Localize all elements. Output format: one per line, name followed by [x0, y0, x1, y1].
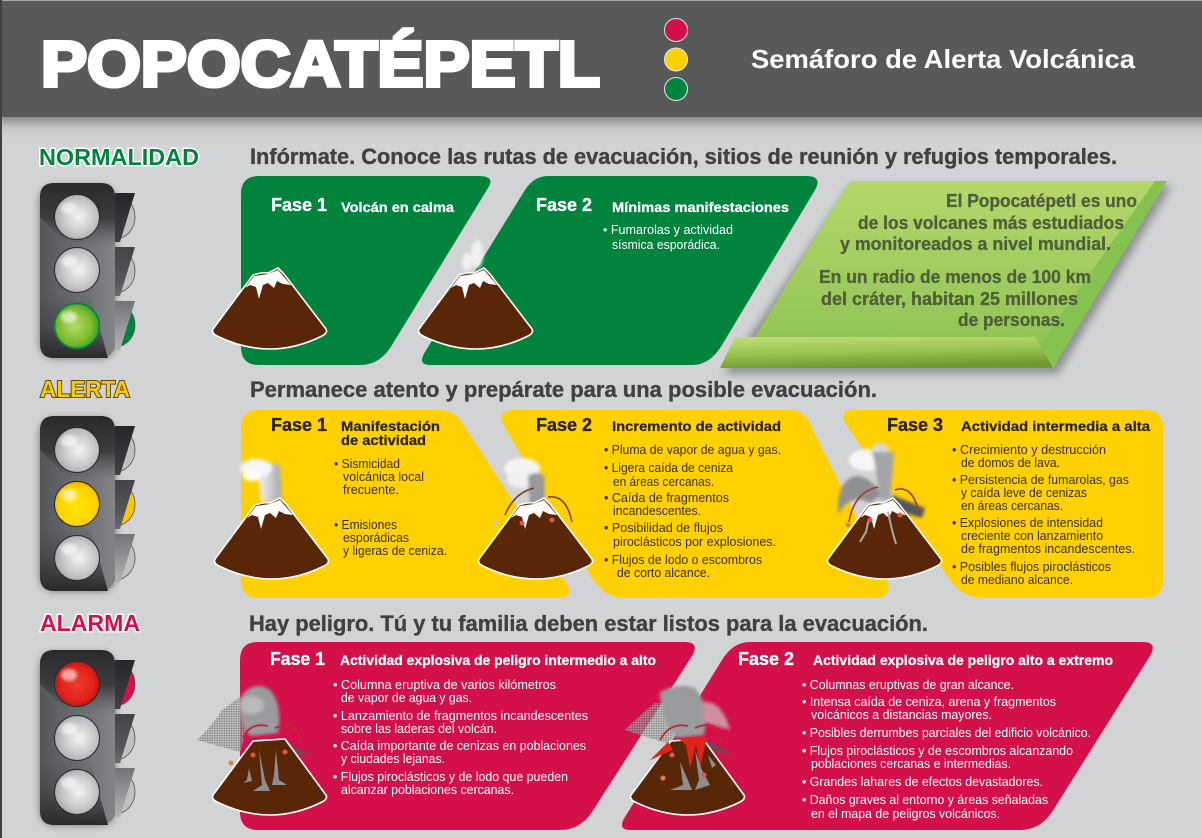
panel: normalidad fase 2: Mínimas manifestaciones: [612, 199, 789, 215]
heading: alerta: Permanece atento y prepárate para una posible evacuación.: [250, 377, 877, 402]
heading: alarma: Hay peligro. Tú y tu familia deben estar listos para la evacuación.: [249, 611, 928, 636]
panel: alerta fase 3: de fragmentos incandescentes.: [961, 542, 1135, 556]
panel: alarma fase 1: • Caída importante de cenizas en poblaciones: [333, 739, 586, 753]
panel: alerta fase 1: Fase 1: [271, 415, 327, 435]
panel: alerta fase 2: de corto alcance.: [617, 566, 710, 580]
panel: alarma fase 2: volcánicos a distancias mayores.: [811, 708, 992, 722]
panel: alerta fase 2: • Posibilidad de flujos: [604, 521, 723, 535]
icon: volcano alerta 1: [214, 459, 328, 579]
panel: normalidad fase 1: Volcán en calma: [341, 199, 454, 215]
panel: alarma fase 2: • Flujos piroclásticos y de escombros alcanzando: [802, 744, 1073, 758]
panel: alarma fase 2: poblaciones cercanas e intermedias.: [811, 757, 1011, 771]
panel: alarma fase 2: • Daños graves al entorno y áreas señaladas: [802, 793, 1048, 807]
panel: alerta fase 2: • Pluma de vapor de agua y gas.: [604, 443, 781, 457]
panel: alerta fase 3: y caída leve de cenizas: [961, 486, 1087, 500]
label: ALARMA: ALARMA: [40, 610, 140, 636]
panel: alerta fase 1: • Emisiones: [334, 518, 397, 532]
panel: alarma fase 1: • Flujos piroclásticos y de lodo que pueden: [333, 770, 568, 784]
icon: volcano fumarole: [418, 240, 532, 349]
panel: alarma fase 2: Actividad explosiva de peligro alto a extremo: [813, 652, 1113, 668]
panel: alerta fase 1: • Sismicidad: [334, 457, 400, 471]
panel: alarma fase 1: Fase 1: [270, 649, 325, 669]
panel: alerta fase 1: frecuente.: [343, 483, 399, 497]
panel: alarma fase 2: • Columnas eruptivas de gran alcance.: [802, 678, 1014, 692]
panel: normalidad fase 2: Fase 2: [536, 195, 592, 215]
note: green folded paper: [720, 181, 1172, 374]
panel: alerta fase 3: Actividad intermedia a alta: [961, 418, 1150, 434]
panel: alerta fase 3: de mediano alcance.: [961, 573, 1073, 587]
panel: alerta fase 3: de domos de lava.: [961, 456, 1060, 470]
panel: alerta fase 1: [241, 410, 569, 598]
header traffic dots: [664, 18, 688, 100]
note: green folded paper: de personas.: [958, 310, 1065, 330]
panel: alarma fase 1: sobre las laderas del volcán.: [341, 722, 497, 736]
icon: volcano alerta 3: [828, 443, 942, 579]
panel: normalidad fase 2: sísmica esporádica.: [612, 238, 720, 252]
note: green folded paper: de los volcanes más estudiados: [858, 213, 1124, 233]
panel: alerta fase 2: [502, 410, 888, 598]
label: NORMALIDAD: NORMALIDAD: [39, 144, 199, 170]
note: green folded paper: del cráter, habitan 25 millones: [821, 289, 1078, 309]
panel: alerta fase 2: • Ligera caída de ceniza: [604, 461, 733, 475]
panel: alerta fase 2: Fase 2: [536, 415, 592, 435]
panel: alerta fase 2: en áreas cercanas.: [613, 475, 714, 489]
icon: volcano calm: [212, 268, 326, 349]
heading: normalidad: Infórmate. Conoce las rutas de evacuación, sitios de reunión y refugios temporales.: [250, 144, 1117, 169]
panel: alerta fase 3: • Posibles flujos piroclásticos: [952, 560, 1111, 574]
icon: volcano alarma 1: [197, 686, 326, 815]
panel: alarma fase 1: • Lanzamiento de fragmentos incandescentes: [333, 709, 588, 723]
panel: alarma fase 1: Actividad explosiva de peligro intermedio a alto: [340, 652, 656, 668]
panel: alarma fase 2: en el mapa de peligros volcánicos.: [811, 807, 1000, 821]
note: green folded paper: En un radio de menos de 100 km: [819, 267, 1091, 287]
panel: alerta fase 3: creciente con lanzamiento: [961, 529, 1103, 543]
panel: normalidad fase 1: [241, 176, 490, 365]
panel: alarma fase 2: [622, 642, 1153, 830]
panel: alerta fase 2: Incremento de actividad: [612, 418, 781, 434]
panel: alerta fase 1: de actividad: [341, 432, 426, 448]
panel: normalidad fase 2: [422, 176, 818, 365]
traffic light: yellow: [40, 416, 135, 591]
panel: normalidad fase 2: • Fumarolas y actividad: [603, 223, 733, 237]
panel: alerta fase 3: • Persistencia de fumarolas, gas: [952, 473, 1129, 487]
label: ALERTA: ALERTA: [40, 376, 130, 402]
panel: alarma fase 1: • Columna eruptiva de varios kilómetros: [333, 678, 556, 692]
panel: alarma fase 1: alcanzar poblaciones cercanas.: [341, 783, 514, 797]
panel: alerta fase 2: incandescentes.: [613, 504, 701, 518]
panel: alarma fase 1: de vapor de agua y gas.: [341, 691, 472, 705]
traffic light: green: [40, 183, 135, 358]
panel: alarma fase 1: y ciudades lejanas.: [341, 752, 445, 766]
panel: alerta fase 1: y ligeras de ceniza.: [343, 544, 447, 558]
icon: volcano alerta 2: [478, 458, 592, 579]
panel: alarma fase 2: Fase 2: [738, 649, 794, 669]
note: green folded paper: El Popocatépetl es uno: [946, 191, 1137, 211]
panel: alerta fase 1: Manifestación: [341, 418, 440, 434]
panel: alerta fase 3: • Crecimiento y destrucción: [952, 443, 1106, 457]
title: POPOCATÉPETL: [41, 28, 600, 100]
note: green folded paper: y monitoreados a nivel mundial.: [840, 234, 1111, 254]
panel: alerta fase 3: • Explosiones de intensidad: [952, 516, 1103, 530]
icon: volcano alarma 2: [625, 686, 744, 815]
subtitle: Semáforo de Alerta Volcánica: [751, 44, 1136, 74]
panel: normalidad fase 1: Fase 1: [271, 195, 327, 215]
panel: alerta fase 2: • Flujos de lodo o escombros: [604, 553, 762, 567]
panel: alarma fase 2: • Grandes lahares de efectos devastadores.: [802, 775, 1043, 789]
panel: alerta fase 3: [843, 410, 1163, 598]
panel: alerta fase 3: Fase 3: [887, 415, 943, 435]
panel: alerta fase 1: esporádicas: [343, 531, 409, 545]
traffic light: red: [40, 650, 135, 825]
panel: alerta fase 2: • Caída de fragmentos: [604, 491, 729, 505]
panel: alarma fase 1: [240, 642, 695, 830]
panel: alerta fase 1: volcánica local: [343, 470, 424, 484]
panel: alerta fase 3: en áreas cercanas.: [961, 499, 1063, 513]
panel: alerta fase 2: piroclásticos por explosiones.: [613, 535, 776, 549]
panel: alarma fase 2: • Posibles derrumbes parciales del edificio volcánico.: [802, 726, 1091, 740]
panel: alarma fase 2: • Intensa caída de ceniza, arena y fragmentos: [802, 695, 1056, 709]
